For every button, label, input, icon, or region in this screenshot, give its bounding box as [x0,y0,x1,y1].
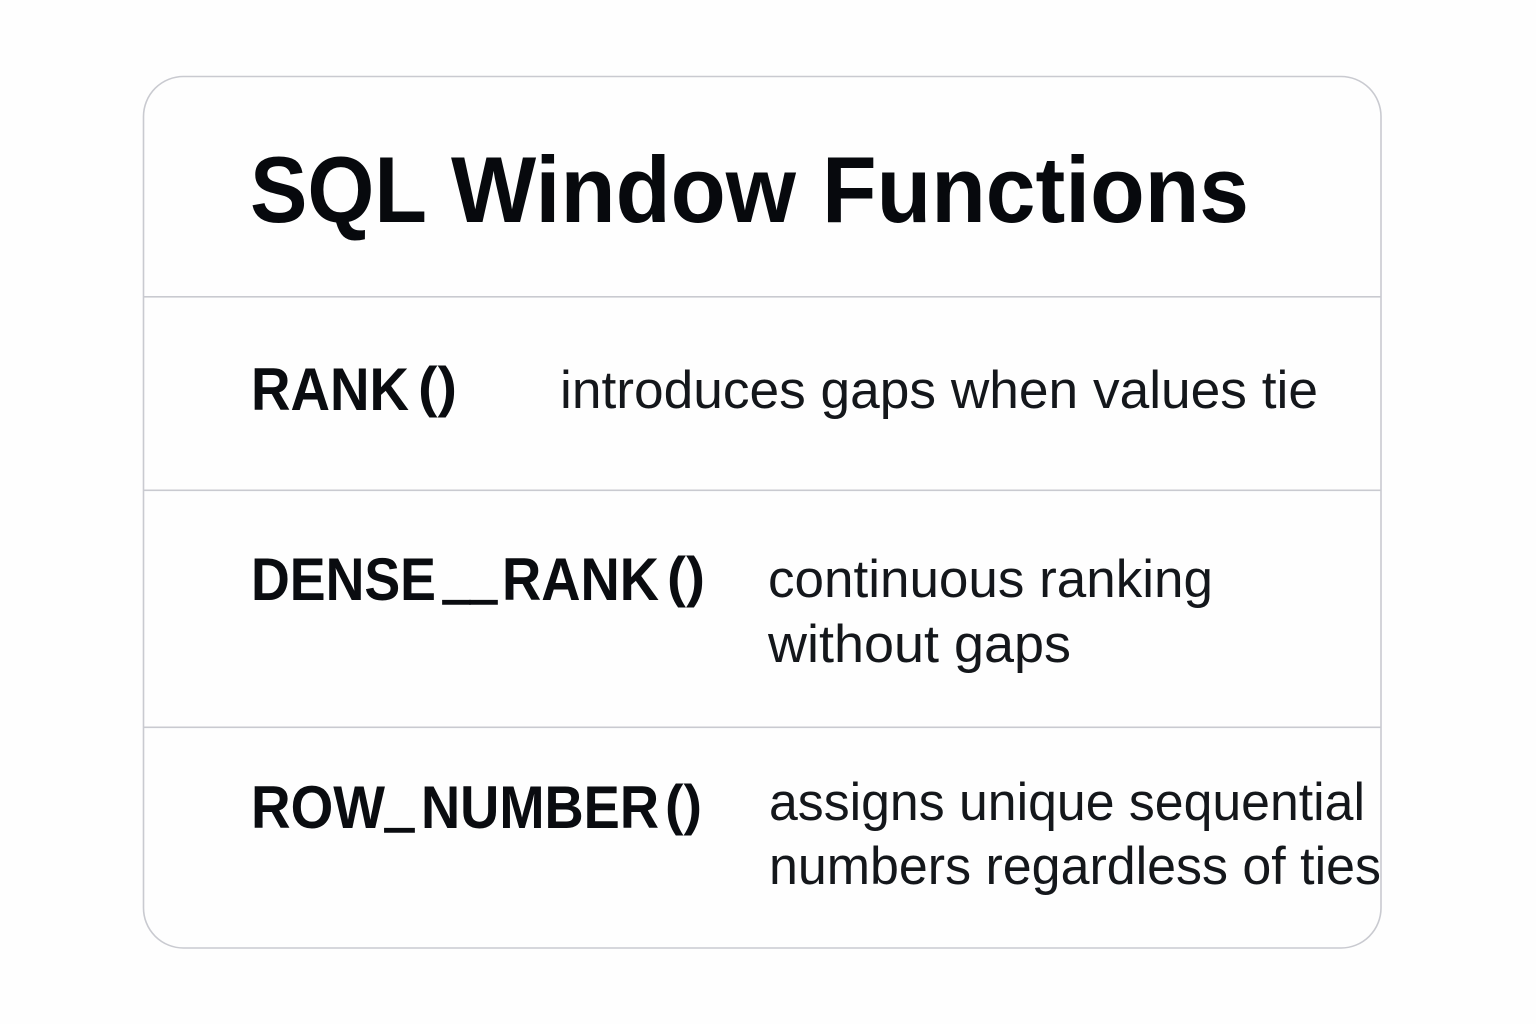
title: SQL [250,137,427,242]
title: Functions [822,137,1249,242]
description: ROW_NUMBER [769,773,1381,896]
function name: DENSE_RANK [251,513,705,613]
function name: ROW_NUMBER [251,741,702,841]
function name: DENSE_RANK: DENSE [251,546,436,613]
function name: ROW_NUMBER: _ [384,741,415,841]
function name: RANK: RANK [251,356,409,423]
panel: card [144,76,1381,948]
function name: DENSE_RANK: __ [442,513,498,613]
function name: ROW_NUMBER: NUMBER [421,774,659,841]
function name: DENSE_RANK: () [667,545,705,608]
description: ROW_NUMBER: assigns unique sequential [769,773,1365,832]
function name: ROW_NUMBER: ROW [251,774,385,841]
title: Window [451,137,797,242]
description: DENSE_RANK: without gaps [767,615,1071,674]
function name: ROW_NUMBER: () [665,773,702,836]
row: RANK [251,355,1318,423]
function name: RANK: () [418,355,457,418]
row: ROW_NUMBER [251,741,1381,896]
description: DENSE_RANK [767,550,1213,674]
row: DENSE_RANK [251,513,1213,674]
description: DENSE_RANK: continuous ranking [768,550,1213,609]
function name: DENSE_RANK: RANK [502,546,659,613]
description: RANK: introduces gaps when values tie [560,361,1318,420]
title [250,137,1249,242]
description: ROW_NUMBER: numbers regardless of ties [769,837,1381,896]
